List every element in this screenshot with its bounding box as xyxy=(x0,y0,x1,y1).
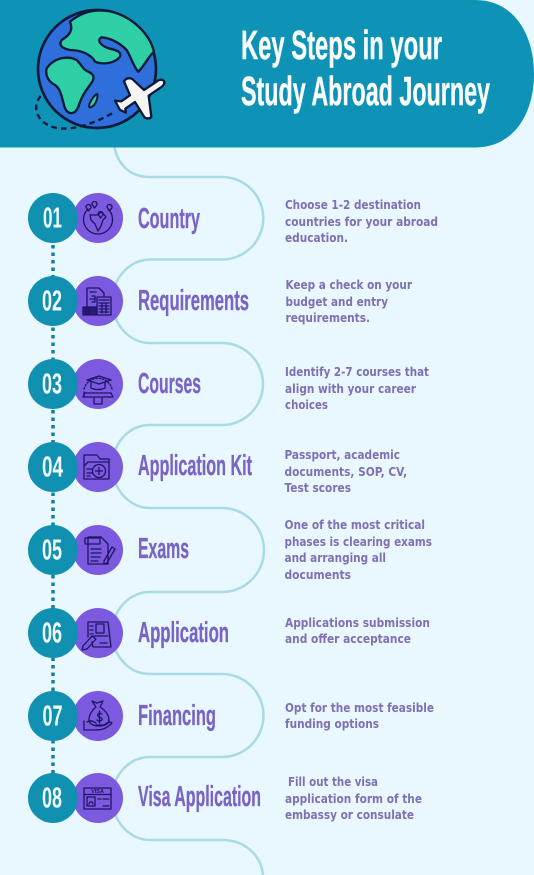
label: Visa Application xyxy=(138,781,261,813)
icon circle xyxy=(73,525,123,575)
icon: graduation cap xyxy=(83,376,113,404)
icon circle xyxy=(73,691,123,741)
description xyxy=(285,775,422,822)
dotted connector between steps xyxy=(51,245,55,865)
number badge xyxy=(28,608,78,658)
label: Exams xyxy=(138,533,189,565)
description xyxy=(286,278,412,325)
description: application form of the xyxy=(285,792,422,806)
description: One of the most critical xyxy=(284,518,425,532)
icon: document folder xyxy=(84,455,109,479)
label: Application xyxy=(138,617,229,649)
description: Identify 2-7 courses that xyxy=(285,365,429,379)
description: align with your career xyxy=(285,382,416,396)
number badge xyxy=(28,773,78,823)
description: choices xyxy=(285,398,328,412)
description: Opt for the most feasible xyxy=(285,701,434,715)
description: and arranging all xyxy=(284,551,386,565)
number: 07 xyxy=(42,700,62,732)
globe ocean xyxy=(38,10,156,128)
icon circle xyxy=(73,442,123,492)
description: and offer acceptance xyxy=(285,632,411,646)
icon circle xyxy=(73,359,123,409)
winding path line xyxy=(112,146,264,875)
icon circle xyxy=(73,276,123,326)
label: Financing xyxy=(138,700,216,732)
description: Fill out the visa xyxy=(288,775,378,789)
description xyxy=(285,701,434,731)
number: 08 xyxy=(42,782,62,814)
step 06 xyxy=(28,608,430,658)
description: budget and entry xyxy=(286,295,388,309)
label: Country xyxy=(138,203,200,235)
description: Choose 1-2 destination xyxy=(285,198,421,212)
continent: Africa xyxy=(46,58,94,113)
icon: money bag in hand xyxy=(84,701,112,730)
description: Keep a check on your xyxy=(286,278,412,292)
label: Requirements xyxy=(138,285,249,317)
label: Courses xyxy=(138,368,201,400)
icon circle xyxy=(73,193,123,243)
icon: application form with hand xyxy=(82,622,111,650)
number: 04 xyxy=(42,452,63,484)
description xyxy=(285,198,438,245)
number badge xyxy=(28,691,78,741)
icon: world map pins xyxy=(84,202,112,234)
description: phases is clearing exams xyxy=(284,535,432,549)
icon: budget calculator xyxy=(83,288,111,315)
step 03 xyxy=(28,359,429,412)
number badge xyxy=(28,193,78,243)
icon circle xyxy=(73,773,123,823)
title xyxy=(241,22,490,114)
icon: visa card: VISA xyxy=(91,789,104,795)
description: funding options xyxy=(285,717,379,731)
number badge xyxy=(28,359,78,409)
description xyxy=(285,616,430,646)
step 05 xyxy=(28,518,432,582)
description: documents, SOP, CV, xyxy=(284,465,407,479)
number: 01 xyxy=(43,202,62,234)
number: 02 xyxy=(42,286,62,318)
icon: exam paper and pen xyxy=(85,537,115,564)
number: 06 xyxy=(42,618,62,650)
description xyxy=(285,365,429,412)
description: Test scores xyxy=(284,481,351,495)
icon: visa card xyxy=(84,788,111,809)
description: Applications submission xyxy=(285,616,430,630)
description: documents xyxy=(284,568,351,582)
number: 03 xyxy=(42,368,62,400)
description xyxy=(284,518,432,582)
airplane xyxy=(115,78,164,118)
header banner xyxy=(0,0,534,148)
continent: Eurasia xyxy=(60,10,154,72)
description: embassy or consulate xyxy=(285,808,414,822)
description xyxy=(284,448,407,495)
description: requirements. xyxy=(286,311,370,325)
number badge xyxy=(28,276,78,326)
flight path xyxy=(36,96,115,129)
number badge xyxy=(28,525,78,575)
step 02 xyxy=(28,276,412,326)
icon circle xyxy=(73,608,123,658)
description: Passport, academic xyxy=(284,448,400,462)
step 04 xyxy=(28,442,407,495)
step 01 xyxy=(28,193,438,245)
description: education. xyxy=(285,231,348,245)
step 08 xyxy=(28,773,422,823)
description: countries for your abroad xyxy=(285,215,438,229)
label: Application Kit xyxy=(138,450,252,482)
number badge xyxy=(28,442,78,492)
island: Madagascar xyxy=(89,94,97,107)
icon: globe with airplane xyxy=(36,10,164,129)
step 07 xyxy=(28,691,434,741)
number: 05 xyxy=(42,534,62,566)
